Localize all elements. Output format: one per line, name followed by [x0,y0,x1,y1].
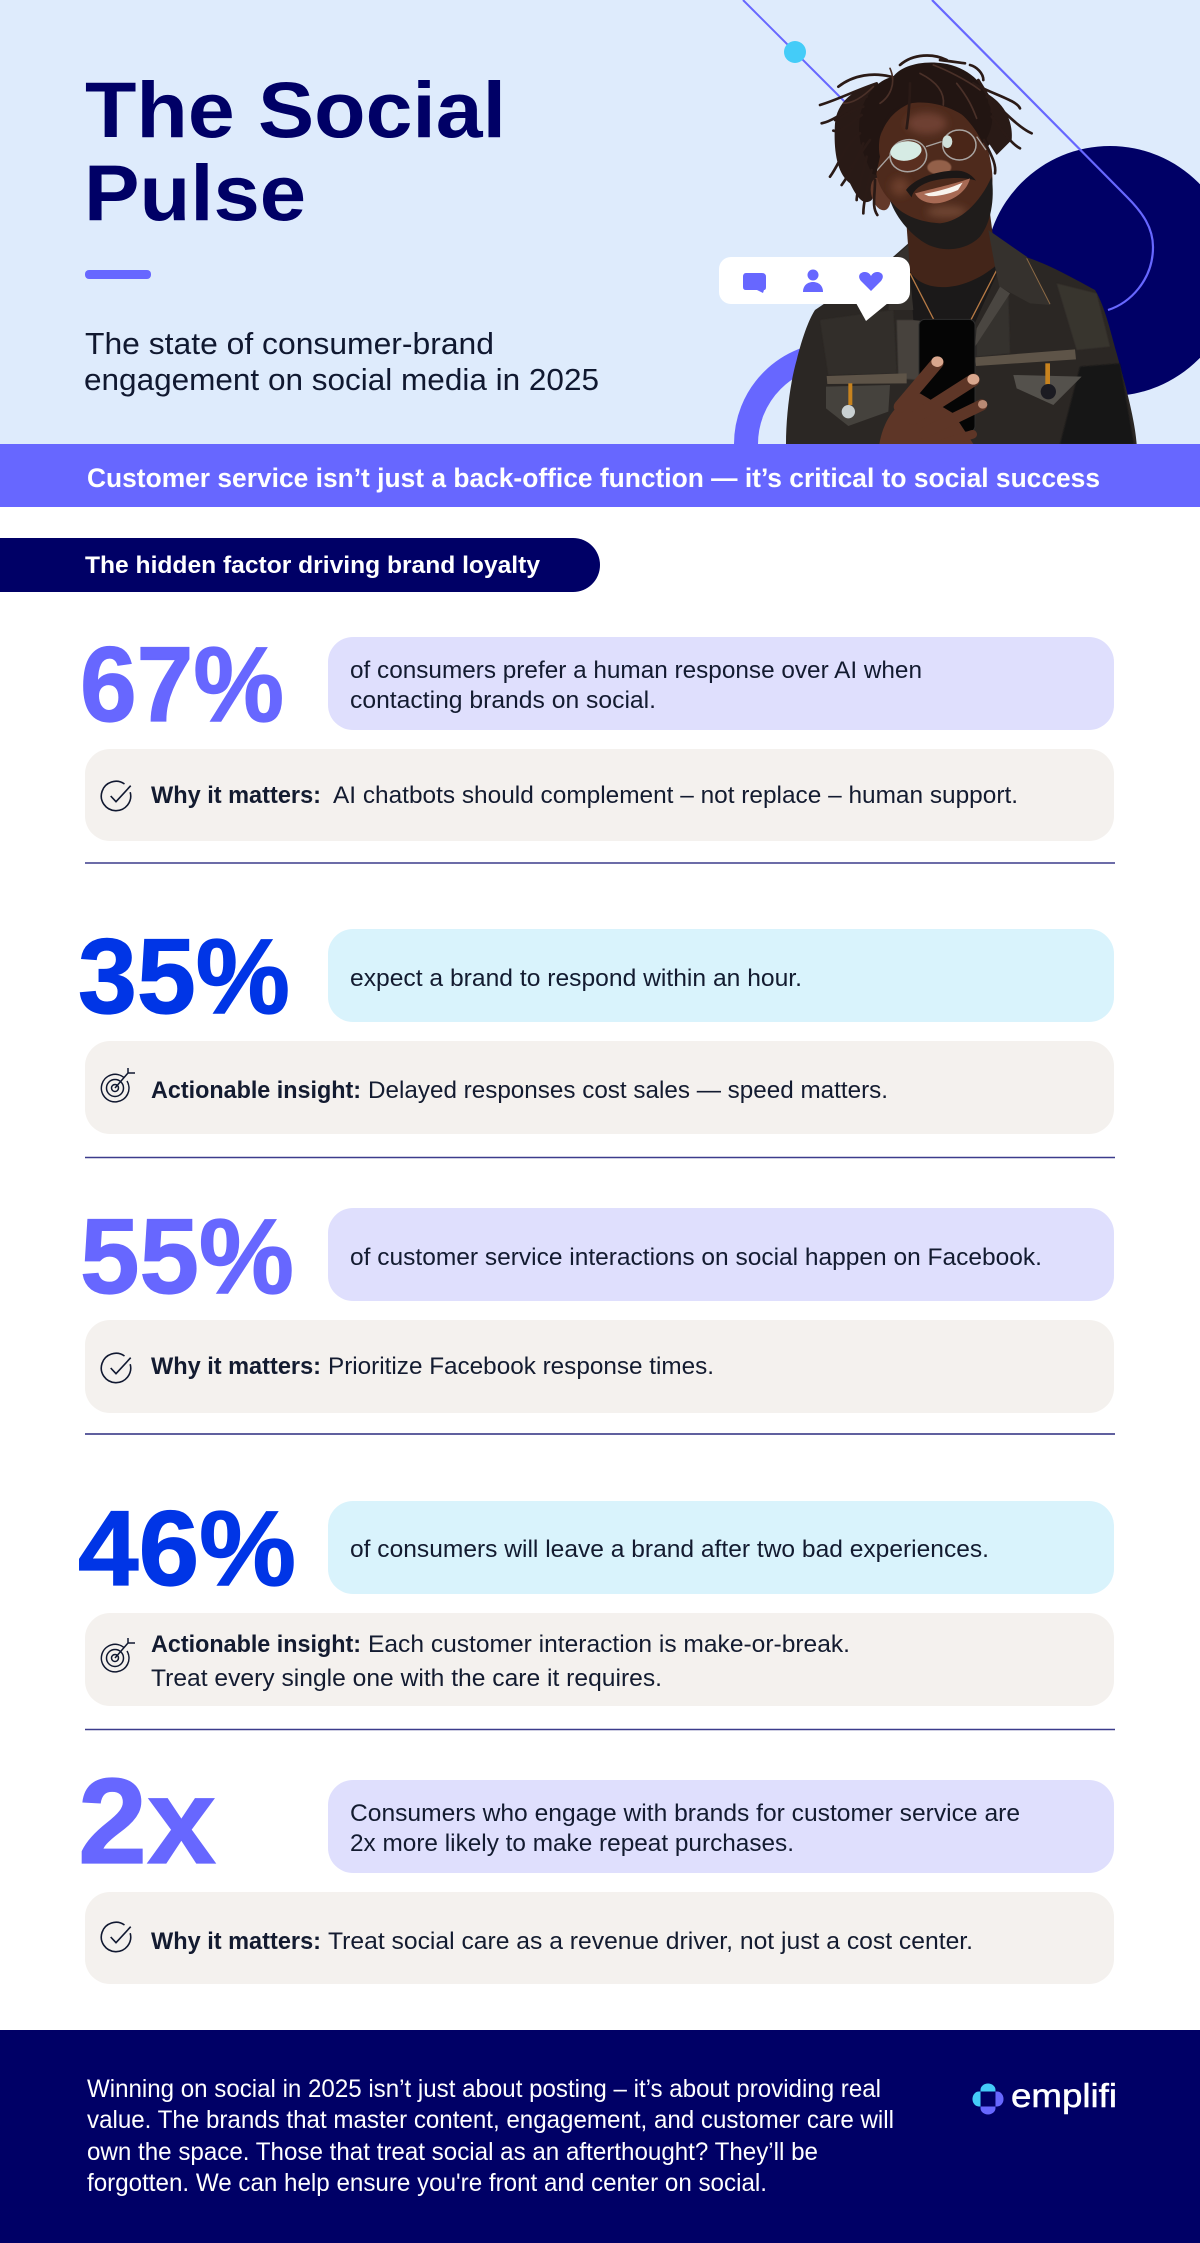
logo mark [972,2083,1004,2115]
diagonal line with dot [743,0,845,102]
stat 46% [78,1488,1114,1706]
phone [919,319,975,432]
actionable insight: Actionable insight: [151,1631,361,1658]
glasses [877,130,986,174]
pockets [826,349,1082,426]
stat 67% [80,624,1114,841]
title: The Social [85,65,506,154]
number: 67% [80,624,284,744]
face [875,103,992,230]
description: 2x more likely to make repeat purchases. [350,1830,794,1857]
description [328,1780,1114,1873]
actionable insight [85,1613,1114,1706]
icon: person [803,270,823,292]
icon: heart [859,272,883,291]
logo: emplifi [1011,2077,1117,2114]
title [84,65,506,237]
closing text: Winning on social in 2025 isn’t just about posting – it’s about providing real [87,2075,881,2103]
why it matters [85,1320,1114,1413]
why it matters: AI chatbots should complement – not replace – human support. [333,782,1018,809]
actionable insight: Each customer interaction is make-or-break. [368,1631,850,1658]
description: of consumers prefer a human response over AI when [350,657,922,684]
description [328,1501,1114,1594]
curved line [932,0,1153,310]
stat 2x [78,1753,1114,1984]
neck [907,213,997,287]
icon: target [101,1638,135,1672]
mouth [915,178,970,203]
title: Pulse [84,148,306,237]
description: Consumers who engage with brands for customer service are [350,1800,1020,1827]
subtitle: The state of consumer-brand [85,326,494,361]
actionable insight: Delayed responses cost sales — speed matters. [368,1077,888,1104]
description [328,929,1114,1022]
navy circle [985,146,1200,396]
social reaction bubble [719,257,910,321]
actionable insight [85,1041,1114,1134]
description: expect a brand to respond within an hour. [350,965,802,992]
beard [890,177,993,249]
why it matters [85,1892,1114,1984]
subtitle [84,326,599,397]
number: 35% [78,916,290,1036]
footer panel [0,2030,1200,2243]
head [820,55,1032,249]
hair [820,55,1032,215]
banner [0,444,1200,507]
why it matters: Treat social care as a revenue driver, not just a cost center. [328,1928,973,1955]
description [328,1208,1114,1301]
subtitle: engagement on social media in 2025 [84,362,599,397]
section heading pill: The hidden factor driving brand loyalty [85,552,541,579]
number: 46% [78,1488,296,1608]
number: 55% [80,1196,294,1316]
description [328,637,1114,730]
necklace [910,270,996,320]
why it matters: Why it matters: [151,1353,321,1380]
collar [888,230,1051,347]
number: 2x [78,1753,216,1889]
closing text: own the space. Those that treat social as an afterthought? They’ll be [87,2138,818,2166]
t-shirt [910,266,996,322]
description: of customer service interactions on social happen on Facebook. [350,1244,1042,1271]
icon: check [101,1922,131,1952]
hair backing [835,70,1012,202]
jacket shading [820,283,1134,444]
icon: check [101,781,131,811]
stat 35% [78,916,1114,1134]
actionable insight: Actionable insight: [151,1077,361,1104]
description: of consumers will leave a brand after two bad experiences. [350,1536,989,1563]
logo [972,2077,1117,2115]
why it matters: Why it matters: [151,782,321,809]
person illustration [786,55,1137,444]
icon: check [101,1353,131,1383]
why it matters: Why it matters: [151,1928,321,1955]
icon: chat [743,273,766,293]
hero panel [0,0,1200,444]
why it matters: Prioritize Facebook response times. [328,1353,714,1380]
icon: target [101,1068,135,1102]
purple arc [734,348,800,444]
section heading pill [0,538,600,592]
closing text: value. The brands that master content, engagement, and customer care will [87,2106,894,2134]
hand [879,356,987,444]
banner: Customer service isn’t just a back-office function — it’s critical to social success [87,463,1100,493]
closing text [87,2075,894,2197]
description: contacting brands on social. [350,687,656,714]
ear [870,178,890,210]
stat 55% [80,1196,1114,1413]
moustache [906,171,976,197]
jacket [786,230,1137,444]
actionable insight: Treat every single one with the care it requires. [151,1665,662,1692]
closing text: forgotten. We can help ensure you're front and center on social. [87,2169,767,2197]
why it matters [85,749,1114,841]
title rule [85,270,151,279]
facial highlights [891,113,967,218]
